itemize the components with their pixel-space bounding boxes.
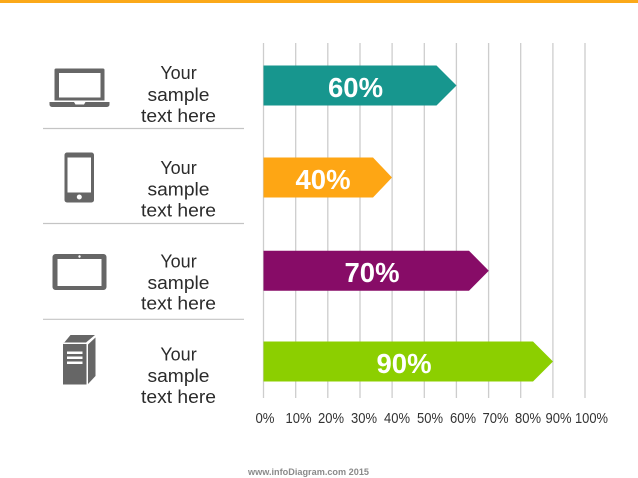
axis labels: 50%	[417, 411, 443, 427]
icon: tablet	[52, 254, 106, 290]
text block: row 2: sample	[148, 180, 210, 200]
bar: 60%: 60%	[328, 72, 383, 103]
axis labels: 10%	[286, 411, 312, 427]
icon: smartphone	[64, 152, 94, 202]
footer credit: www.infoDiagram.com 2015	[247, 467, 370, 478]
bar: 90%	[264, 342, 553, 382]
text block: row 1	[141, 63, 216, 126]
icon: laptop	[50, 68, 110, 107]
text block: row 3	[141, 252, 216, 314]
text block: row 3: Your	[160, 252, 197, 272]
bar: 40%: 40%	[296, 164, 351, 195]
axis labels: 70%	[482, 411, 509, 427]
text block: row 2: Your	[160, 158, 197, 178]
top accent bar	[0, 0, 638, 3]
bar: 40%	[264, 158, 392, 198]
axis labels	[256, 411, 608, 427]
text block: row 4	[141, 344, 216, 407]
text block: row 2: text here	[141, 200, 216, 220]
axis labels: 60%	[450, 411, 476, 427]
text block: row 3: text here	[141, 294, 216, 314]
text block: row 4: sample	[148, 366, 210, 386]
axis labels: 30%	[351, 411, 377, 427]
axis labels: 90%	[546, 411, 572, 427]
text block: row 4: text here	[141, 387, 216, 407]
text block: row 1: Your	[160, 63, 197, 83]
text block: row 1: sample	[148, 85, 210, 105]
text block: row 4: Your	[160, 344, 197, 364]
axis labels: 20%	[318, 411, 344, 427]
axis labels: 80%	[515, 411, 541, 427]
axis labels: 100%	[575, 411, 608, 427]
text block: row 3: sample	[148, 273, 210, 293]
axis labels: 0%	[256, 411, 275, 427]
text block: row 1: text here	[141, 106, 216, 126]
bar: 70%	[264, 251, 489, 291]
text block: row 2	[141, 158, 216, 220]
bar: 60%	[264, 66, 456, 106]
icon: server tower	[63, 335, 96, 384]
bar: 70%: 70%	[344, 257, 400, 288]
bar: 90%: 90%	[376, 348, 432, 379]
axis labels: 40%	[384, 411, 410, 427]
